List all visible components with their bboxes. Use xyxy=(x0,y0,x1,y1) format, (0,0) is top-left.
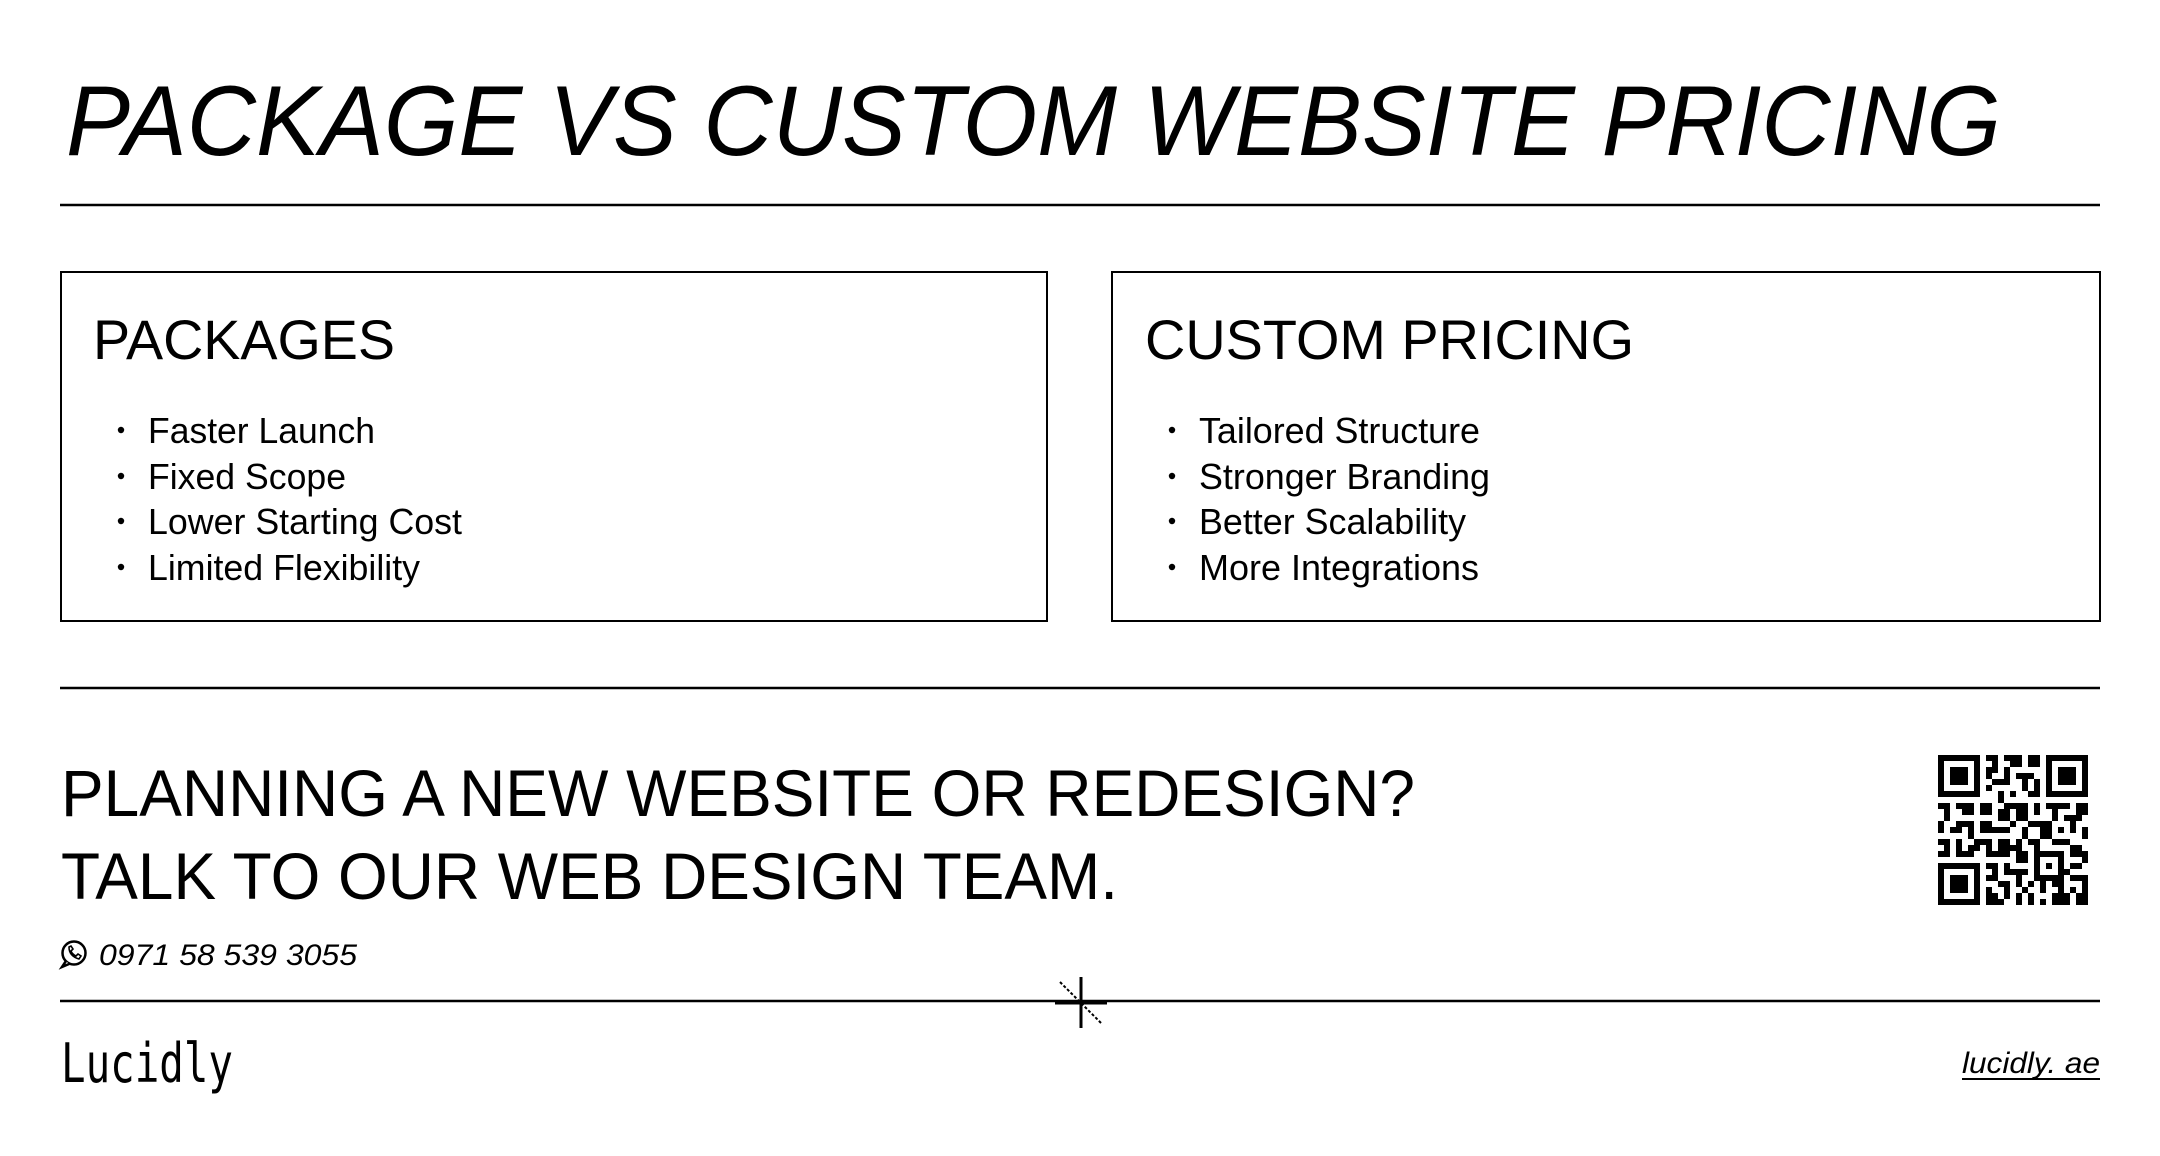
list: packages benefits: Faster Launch xyxy=(148,410,375,451)
list: custom benefits xyxy=(1169,410,1490,588)
logo: Lucidly: Lucidly xyxy=(61,1032,233,1095)
QR code xyxy=(1938,755,2088,905)
list: packages benefits: Fixed Scope xyxy=(148,456,346,497)
heading: custom pricing: CUSTOM PRICING xyxy=(1145,308,1634,371)
phone contact: 0971 58 539 3055 xyxy=(99,939,357,972)
list: custom benefits: Tailored Structure xyxy=(1199,410,1480,451)
list: custom benefits: Better Scalability xyxy=(1199,501,1466,542)
list: packages benefits: Limited Flexibility xyxy=(148,547,420,588)
icon: star cross xyxy=(1055,977,1107,1028)
panel: custom pricing xyxy=(1112,272,2100,621)
call to action text: PLANNING A NEW WEBSITE OR REDESIGN? xyxy=(61,756,1415,830)
heading: packages: PACKAGES xyxy=(93,308,395,371)
panel: packages xyxy=(61,272,1047,621)
list: packages benefits: Lower Starting Cost xyxy=(148,501,462,542)
list: packages benefits xyxy=(118,410,462,588)
list: custom benefits: More Integrations xyxy=(1199,547,1479,588)
title: PACKAGE VS CUSTOM WEBSITE PRICING xyxy=(66,65,2001,176)
list: custom benefits: Stronger Branding xyxy=(1199,456,1490,497)
icon: whatsapp xyxy=(62,942,86,967)
call to action text xyxy=(61,756,1415,913)
call to action text: TALK TO OUR WEB DESIGN TEAM. xyxy=(61,839,1118,913)
website link: lucidly. ae xyxy=(1962,1047,2100,1080)
